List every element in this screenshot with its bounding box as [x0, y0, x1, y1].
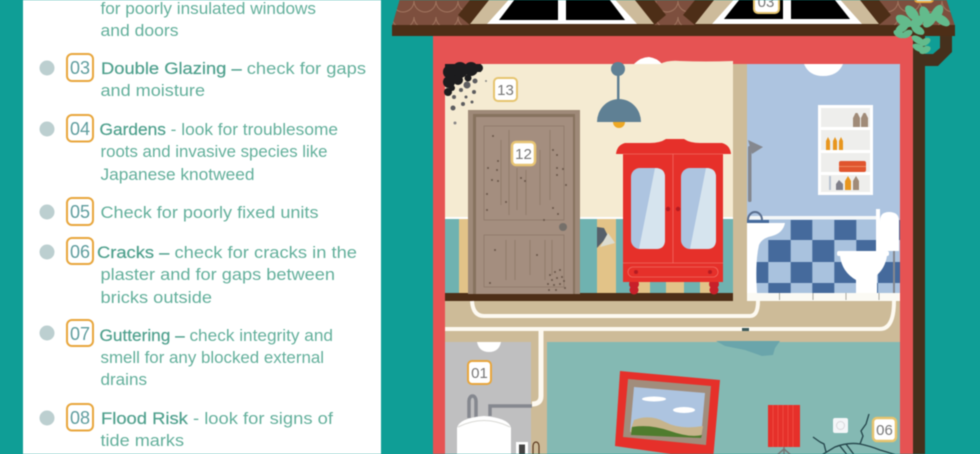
badge 01 — [468, 361, 491, 384]
wardrobe — [616, 139, 731, 294]
badge 06 — [873, 418, 896, 441]
item 07 guttering: smell for any blocked external — [100, 349, 324, 367]
wardrobe mirror right — [681, 168, 716, 249]
panel: checklist — [23, 0, 381, 454]
wall column — [733, 64, 747, 301]
badge 06: 06 — [876, 422, 893, 439]
item 02 continuation text: and doors — [100, 22, 178, 40]
boiler — [457, 396, 532, 454]
bathroom shelf — [818, 105, 873, 195]
plug socket — [516, 442, 539, 454]
pipes — [472, 301, 758, 316]
gutter inner opening — [925, 36, 940, 54]
room: bathroom — [747, 64, 900, 301]
item 03 double glazing: and moisture — [100, 82, 205, 100]
badge 01: 01 — [471, 365, 488, 382]
door — [468, 110, 580, 294]
item 07 guttering: Guttering – check integrity and — [100, 327, 333, 345]
rail — [748, 216, 880, 220]
wallpaper stripes — [459, 219, 714, 294]
leak drip — [742, 328, 749, 331]
floor — [445, 293, 733, 301]
radiator — [768, 405, 800, 454]
item 07 guttering — [40, 320, 333, 389]
torn wallpaper — [597, 227, 615, 248]
item 08 flood risk: tide marks — [100, 432, 184, 450]
door scratches — [501, 130, 552, 280]
room: main basement — [547, 328, 900, 454]
roof — [392, 0, 955, 36]
ceiling lamp — [597, 62, 641, 128]
item 06 cracks — [40, 238, 357, 307]
item 04 gardens: 04 — [70, 119, 90, 139]
toilet — [837, 209, 899, 293]
item 04 gardens: Japanese knotweed — [100, 166, 254, 184]
bathroom lamp — [804, 64, 843, 76]
plant in gutter — [892, 3, 952, 56]
item 05 fixed units — [40, 198, 318, 225]
item 07 guttering: drains — [100, 371, 147, 389]
down pipe and gutter — [913, 27, 955, 454]
item 08 flood risk: 08 — [70, 408, 90, 428]
item 03 double glazing: Double Glazing – check for gaps — [101, 60, 366, 78]
item 08 flood risk: Flood Risk - look for signs of — [101, 410, 333, 428]
badge roof partial — [915, 0, 933, 2]
item 07 guttering: 07 — [70, 324, 90, 344]
room: bedroom upper left — [445, 64, 733, 301]
item 02 continuation text — [100, 0, 316, 40]
water stain — [716, 341, 780, 356]
item 04 gardens: roots and invasive species like — [100, 143, 328, 161]
badge 12 — [512, 142, 535, 165]
item 06 cracks: Cracks – check for cracks in the — [97, 244, 357, 262]
picture frame — [615, 371, 720, 454]
utility lamp — [477, 342, 501, 352]
wardrobe mirror left — [631, 168, 665, 249]
house walls — [433, 36, 913, 454]
item 02 continuation text: for poorly insulated windows — [100, 0, 316, 18]
badge 12: 12 — [515, 146, 532, 163]
gable window left — [458, 0, 666, 25]
bathroom floor — [747, 293, 900, 301]
item 06 cracks: 06 — [70, 242, 90, 262]
wall cracks — [813, 414, 900, 454]
shower — [748, 140, 763, 202]
tiles — [747, 219, 900, 293]
item 08 flood risk — [40, 404, 333, 450]
floor void — [445, 301, 900, 342]
item 05 fixed units: Check for poorly fixed units — [100, 204, 318, 222]
badge 13 — [494, 78, 517, 101]
item 06 cracks: plaster and for gaps between — [100, 266, 335, 284]
badge 13: 13 — [497, 82, 514, 99]
house — [392, 0, 955, 454]
vertical pipe — [532, 329, 541, 404]
door speckles — [486, 135, 567, 291]
item 06 cracks: bricks outside — [100, 289, 212, 307]
room: utility — [445, 329, 547, 454]
gable window right — [683, 0, 891, 25]
door knob — [559, 223, 567, 231]
light switch — [833, 418, 848, 433]
sink — [747, 212, 785, 293]
item 03 double glazing: 03 — [70, 58, 90, 78]
item 05 fixed units: 05 — [70, 202, 90, 222]
badge 03 — [754, 0, 779, 13]
item 04 gardens — [40, 115, 338, 184]
mould — [443, 62, 487, 124]
item 03 double glazing — [40, 54, 366, 100]
ceiling crack — [634, 57, 733, 66]
item 04 gardens: Gardens - look for troublesome — [100, 121, 338, 139]
